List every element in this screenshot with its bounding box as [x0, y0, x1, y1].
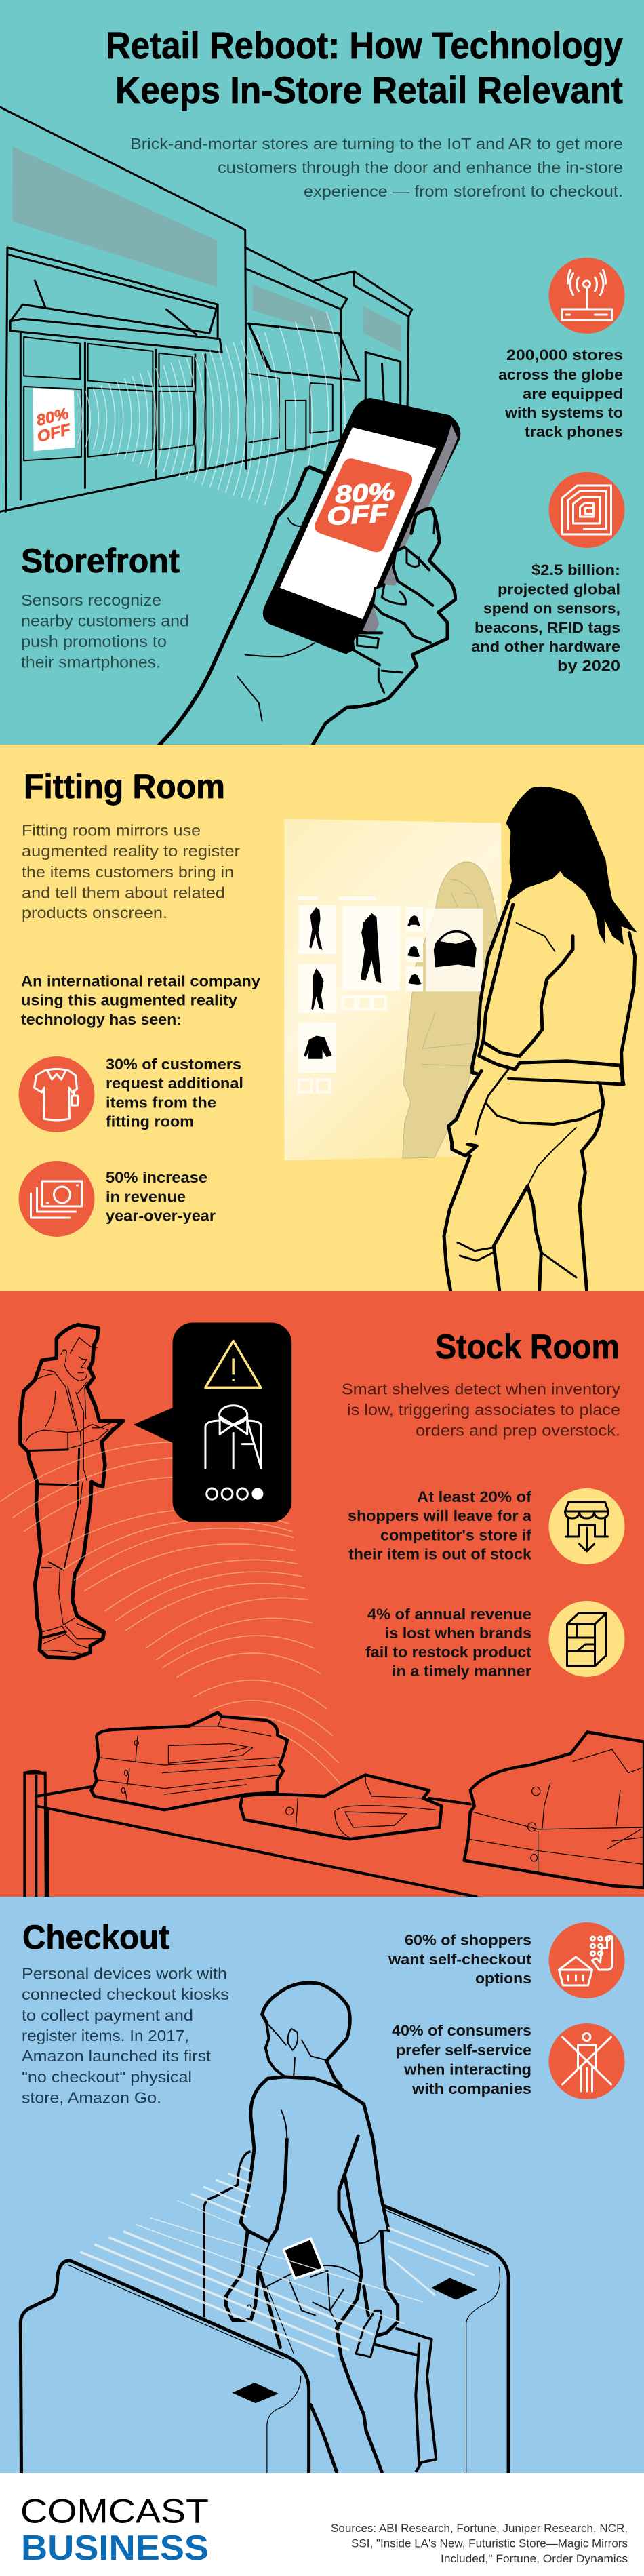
illustration: associate checking phone [20, 1325, 123, 1658]
shopper: head [262, 1983, 350, 2078]
icon: store with down arrow [549, 1488, 625, 1564]
poster text: 80% off: 80% [35, 404, 71, 429]
table [24, 1771, 46, 1903]
stat: 60% of shoppers [388, 1931, 532, 1987]
stat: $2.5 billion: and other hardware [471, 638, 620, 655]
customer: body fill [444, 873, 635, 1299]
text: checkout description [22, 1965, 229, 2106]
shopper: body fill [226, 2077, 398, 2472]
stat: 40% of consumers: 40% of consumers [392, 2022, 531, 2039]
stat: at least 20% of shoppers: shoppers will leave for a [348, 1507, 532, 1524]
icon: basket and keypad [549, 1922, 625, 1998]
hand: fingers over phone [283, 508, 456, 747]
text: sources: Sources: ABI Research, Fortune, Juniper Research, NCR, [331, 2522, 628, 2535]
stat: 50% increase: year-over-year [106, 1207, 216, 1225]
icon: shirt with tag [19, 1056, 95, 1132]
AR card silhouettes [304, 907, 477, 1059]
panel: footer [0, 2473, 644, 2576]
intro text: experience — from storefront to checkout. [304, 182, 623, 200]
stat: 30% of customers: items from the [106, 1094, 216, 1111]
panel: checkout [0, 1897, 644, 2476]
illustration: shopper [226, 1983, 436, 2472]
text: fitting room description [22, 822, 240, 922]
stat: 200,000 stores: across the globe [498, 366, 623, 383]
customer: hair [506, 787, 637, 945]
text: sources: SSI, "Inside LA's New, Futuristic Store—Magic Mirrors [351, 2537, 628, 2550]
pocket phone [283, 2238, 323, 2278]
stat: 60% of shoppers: options [475, 1970, 531, 1987]
text: retail company lead-in: using this augmented reality [21, 991, 238, 1009]
shopper: legs [310, 2328, 382, 2472]
stat: 40% of consumers [392, 2022, 531, 2097]
stat: 60% of shoppers: want self-checkout [388, 1951, 532, 1968]
text: fitting room description: the items customers bring in [22, 863, 234, 881]
text: sources [331, 2522, 628, 2565]
shopper: torso and arms [241, 2077, 388, 2242]
heading: storefront: Storefront [21, 542, 180, 580]
stat: at least 20% of shoppers: their item is out of stock [348, 1546, 532, 1562]
stat: 200,000 stores: 200,000 stores [506, 346, 623, 363]
stat: at least 20% of shoppers: competitor's store if [380, 1527, 532, 1543]
title [106, 24, 623, 111]
text: retail company lead-in [21, 972, 261, 1028]
text: storefront description: push promotions to [21, 633, 167, 650]
text: checkout description: to collect payment and [22, 2006, 193, 2024]
text: fitting room description: and tell them about related [22, 884, 225, 902]
logo: Comcast Business: COMCAST [20, 2493, 209, 2531]
panel: stock room [0, 1291, 644, 1903]
text: storefront description: Sensors recognize [21, 591, 161, 609]
folded shirts: middle shirt [240, 1775, 441, 1839]
text: checkout description: Amazon launched its first [22, 2047, 212, 2065]
intro text: customers through the door and enhance the in-store [218, 159, 623, 176]
icon: crossed-out person [549, 2023, 625, 2099]
signal waves [78, 312, 345, 526]
AR cards [298, 896, 483, 1073]
customer: jacket outlines [472, 901, 635, 1084]
text: stock room description: orders and prep overstock. [416, 1421, 620, 1439]
scanner beams [80, 2166, 489, 2356]
illustration: smart shelves and bubble [0, 1323, 644, 1903]
text: retail company lead-in: An international retail company [21, 972, 261, 990]
stat: 30% of customers: fitting room [106, 1113, 194, 1130]
stat: 200,000 stores: with systems to [504, 404, 623, 421]
stat: $2.5 billion: $2.5 billion: [531, 561, 620, 578]
sensor waves [0, 1442, 341, 1785]
illustration: shopping street with storefronts [0, 107, 412, 526]
icon: stack of cash [19, 1161, 95, 1237]
stat: $2.5 billion: spend on sensors, [483, 599, 620, 617]
stat: 60% of shoppers: 60% of shoppers [405, 1931, 531, 1949]
smartphone [263, 398, 460, 654]
heading: fitting room: Fitting Room [24, 768, 225, 806]
panel: storefront [0, 0, 644, 747]
text: stock room description: Smart shelves detect when inventory [342, 1381, 621, 1398]
illustration: customer at mirror [444, 787, 637, 1299]
stat: 50% increase [106, 1169, 216, 1225]
text: checkout description: connected checkout kiosks [22, 1985, 229, 2003]
icon: empty shelf [549, 1601, 625, 1677]
stat: 30% of customers: 30% of customers [106, 1056, 241, 1073]
stat: 200,000 stores: are equipped [523, 385, 623, 402]
stat: 40% of consumers: prefer self-service [396, 2042, 531, 2059]
text: fitting room description: products onscreen. [22, 904, 167, 922]
text: storefront description: nearby customers and [21, 612, 189, 629]
shopper: pocket [266, 2265, 359, 2328]
stat: $2.5 billion: projected global [498, 580, 620, 598]
mirror [284, 819, 502, 1160]
stat: 50% increase: in revenue [106, 1188, 186, 1206]
text: checkout description: register items. In 2017, [22, 2027, 189, 2044]
poster: window sale sign [33, 388, 75, 451]
illustration: rear kiosks [204, 2152, 508, 2473]
stat: at least 20% of shoppers: At least 20% of [417, 1488, 532, 1505]
stat: 30% of customers: request additional [106, 1075, 243, 1092]
heading: checkout: Checkout [22, 1918, 169, 1956]
text: storefront description [21, 591, 189, 671]
reflection [403, 862, 498, 1158]
icon: router [549, 258, 625, 334]
phone badge text: 80% off: OFF [326, 499, 390, 530]
folded shirts: right stack [464, 1732, 644, 1888]
heading: stock room: Stock Room [435, 1328, 620, 1366]
text: stock room description: is low, triggering associates to place [347, 1401, 620, 1419]
stat: 4% of annual revenue [365, 1606, 532, 1680]
customer: arm and trousers [444, 1071, 603, 1299]
panel: fitting room [0, 745, 644, 1299]
stat: $2.5 billion: by 2020 [557, 657, 620, 674]
stat: 4% of annual revenue: in a timely manner [392, 1663, 531, 1680]
poster text: 80% off [35, 404, 73, 445]
logo: Comcast Business [20, 2493, 209, 2568]
text: checkout description: Personal devices work with [22, 1965, 227, 1983]
stat: $2.5 billion [471, 561, 620, 674]
logo: Comcast Business: BUSINESS [21, 2529, 209, 2568]
stat: 40% of consumers: when interacting [403, 2061, 531, 2078]
text: storefront description: their smartphones. [21, 654, 161, 671]
text: checkout description: "no checkout" physical [22, 2068, 192, 2086]
stat: 200,000 stores: track phones [525, 423, 623, 440]
illustration: AR mirror [284, 819, 502, 1160]
stat: at least 20% of shoppers [348, 1488, 532, 1562]
intro text: Brick-and-mortar stores are turning to the IoT and AR to get more [130, 135, 623, 153]
stat: 4% of annual revenue: 4% of annual revenue [367, 1606, 531, 1623]
text: stock room description [342, 1381, 621, 1439]
phone badge text: 80% off: 80% [334, 477, 395, 509]
stat: 4% of annual revenue: fail to restock product [365, 1644, 532, 1661]
intro text [130, 135, 623, 200]
text: fitting room description: Fitting room mirrors use [22, 822, 201, 839]
text: fitting room description: augmented reality to register [22, 842, 240, 860]
phone badge text: 80% off [326, 477, 395, 530]
text: sources: Included," Fortune, Order Dynamics [441, 2552, 628, 2565]
stat: 4% of annual revenue: is lost when brands [385, 1625, 531, 1642]
illustration: hand holding smartphone [158, 398, 460, 747]
speech bubble [134, 1323, 291, 1522]
stat: 40% of consumers: with companies [411, 2080, 531, 2097]
stat: 50% increase: 50% increase [106, 1169, 207, 1186]
stat: 200,000 stores [498, 346, 623, 440]
illustration: front kiosk and beams [20, 2166, 489, 2476]
stat: 30% of customers [106, 1056, 243, 1130]
text: checkout description: store, Amazon Go. [22, 2088, 161, 2106]
text: retail company lead-in: technology has seen: [21, 1011, 182, 1028]
poster text: 80% off: OFF [35, 420, 73, 445]
icon: RFID tag [549, 472, 625, 548]
hand: palm behind phone [158, 467, 350, 747]
belt strap [373, 2328, 436, 2472]
stat: $2.5 billion: beacons, RFID tags [475, 619, 620, 636]
folded shirts: left stack [92, 1713, 287, 1810]
